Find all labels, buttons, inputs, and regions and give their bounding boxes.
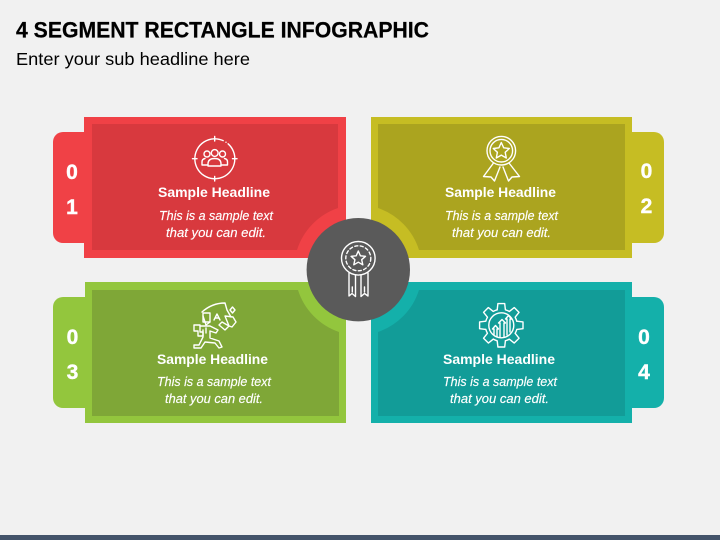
body text 02: This is a sample text [445, 209, 559, 223]
outer frame olive [371, 117, 632, 258]
title: 4 SEGMENT RECTANGLE INFOGRAPHIC [16, 18, 429, 42]
panel: segment 02 olive [371, 117, 664, 258]
body text 02 [445, 209, 559, 240]
number 04: 4 [638, 361, 650, 384]
inner panel olive [378, 124, 625, 250]
body text 04: that you can edit. [450, 392, 549, 406]
icon: target group of people [192, 136, 237, 181]
number 03: 0 [67, 326, 78, 349]
number 03 [67, 326, 78, 384]
panel: segment 03 green [53, 282, 346, 423]
headline 02: Sample Headline [445, 185, 556, 200]
body text 03: This is a sample text [157, 375, 272, 389]
headline 01: Sample Headline [158, 185, 271, 200]
outer frame red [84, 117, 346, 258]
body text 03 [157, 375, 272, 406]
panel: segment 01 red [53, 117, 346, 258]
footer bar [0, 535, 720, 540]
inner panel red [92, 124, 338, 250]
body text 01 [159, 209, 274, 240]
icon: gear with rising chart [480, 304, 523, 347]
panel: segment 04 teal [371, 282, 664, 423]
icon: running person with megaphone [194, 303, 236, 348]
inner panel teal [378, 290, 625, 416]
number 03: 3 [67, 361, 78, 384]
number 02: 0 [641, 160, 652, 183]
headline 04: Sample Headline [443, 352, 556, 367]
number 02 [641, 160, 652, 218]
inner panel green [92, 290, 339, 416]
body text 01: that you can edit. [166, 226, 266, 240]
headline 03: Sample Headline [157, 352, 268, 367]
outer frame green [85, 282, 346, 423]
body text 04 [443, 375, 558, 406]
number tab 01 [53, 132, 84, 243]
number 04: 0 [638, 326, 650, 349]
outer frame teal [371, 282, 632, 423]
center circle badge [307, 218, 410, 321]
body text 03: that you can edit. [165, 392, 263, 406]
number 01: 1 [66, 196, 78, 219]
number 01 [66, 161, 78, 219]
number 04 [638, 326, 650, 384]
number tab 03 [53, 297, 85, 408]
icon: award ribbon [484, 136, 520, 181]
number 02: 2 [641, 195, 652, 218]
number tab 04 [632, 297, 664, 408]
icon: medal with star [342, 241, 375, 296]
body text 01: This is a sample text [159, 209, 274, 223]
number tab 02 [632, 132, 664, 243]
body text 04: This is a sample text [443, 375, 558, 389]
subtitle: Enter your sub headline here [16, 49, 250, 69]
number 01: 0 [66, 161, 78, 184]
body text 02: that you can edit. [452, 226, 551, 240]
